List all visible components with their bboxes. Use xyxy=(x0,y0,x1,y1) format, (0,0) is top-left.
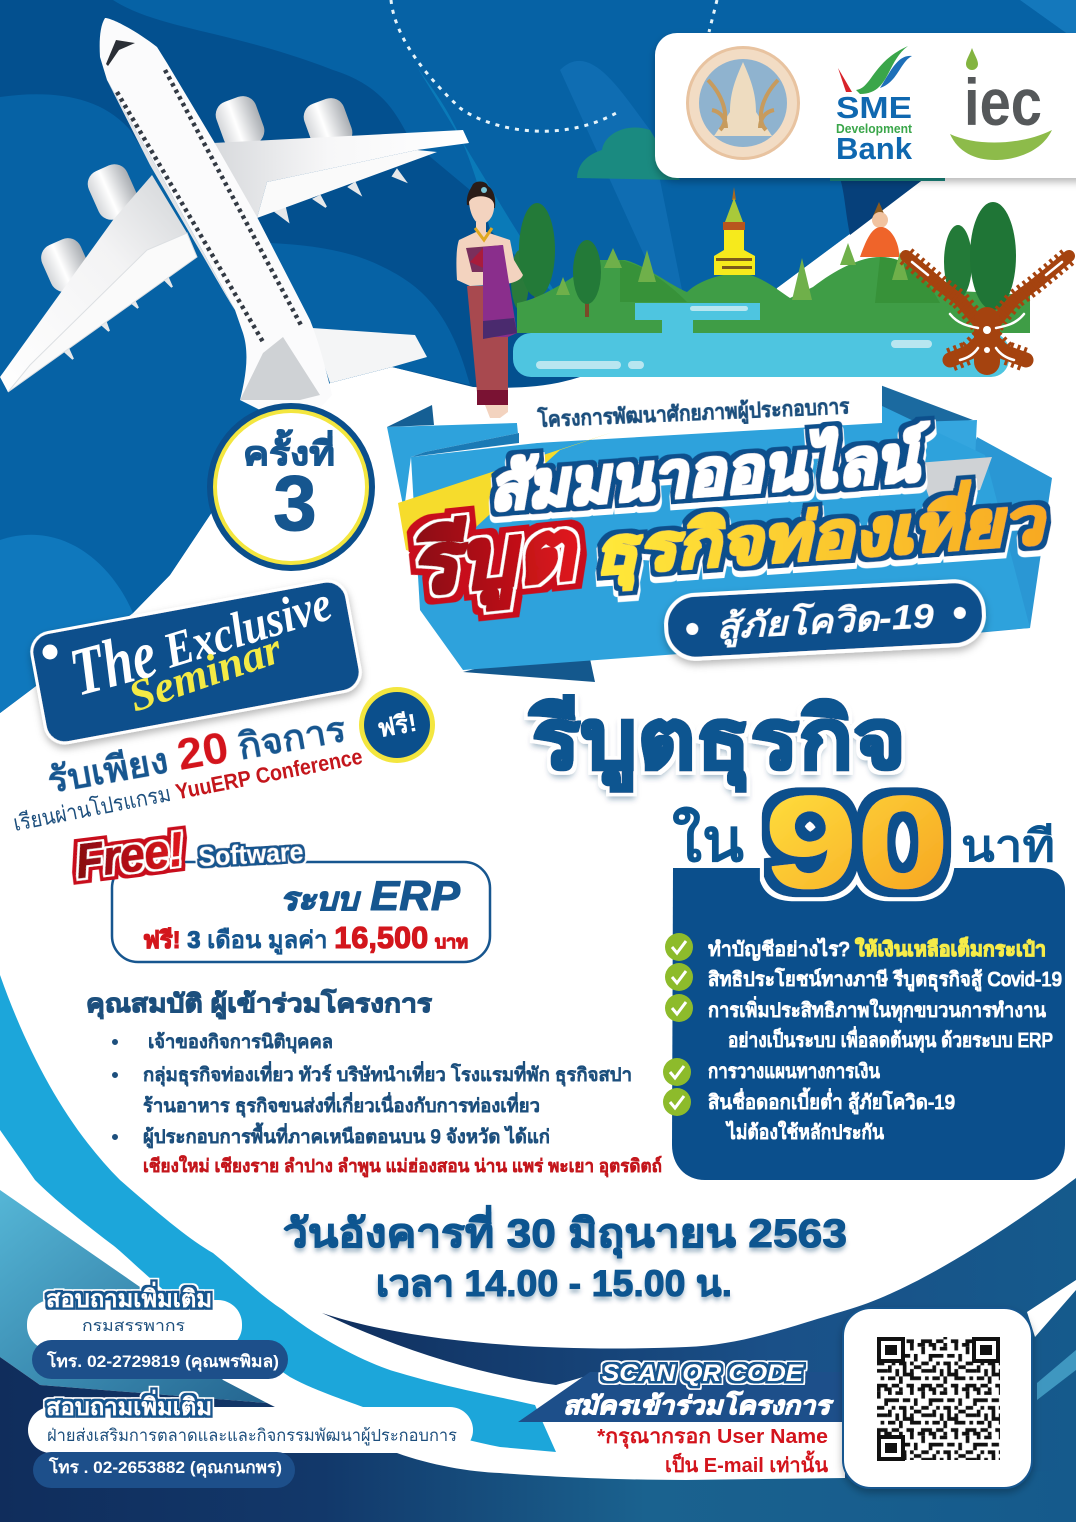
icon: naga ornament xyxy=(906,256,1069,362)
hair pin xyxy=(481,187,487,193)
text: free 3 months value: ฟรี! 3 เดือน มูลค่า 16,500 บาท xyxy=(143,920,468,955)
left wing xyxy=(0,175,197,392)
sticker: software: Software xyxy=(198,837,304,872)
text: ERP system: ระบบ ERP xyxy=(280,872,461,919)
qualifications xyxy=(86,988,662,1177)
pill: fight covid-19 xyxy=(665,580,985,660)
badge: free: ฟรี! xyxy=(375,709,419,743)
agenda list: การเพิ่มประสิทธิภาพในทุกขบวนการทำงาน xyxy=(708,996,1046,1023)
hair xyxy=(467,182,495,208)
contact: revenue department xyxy=(27,1281,288,1379)
heading: in: ใน xyxy=(672,806,744,874)
top wrap xyxy=(466,245,505,272)
cyan stripe xyxy=(0,975,556,1452)
tail fin xyxy=(240,337,320,400)
white streak xyxy=(1027,1280,1076,1337)
logo: iec xyxy=(950,48,1052,160)
qualifications list xyxy=(143,1032,662,1177)
contact heading: สอบถามเพิ่มเติม xyxy=(46,1389,212,1421)
banner ribbon xyxy=(387,382,1052,682)
department name: กรมสรรพากร xyxy=(82,1318,185,1335)
tag: the exclusive seminar: Seminar xyxy=(122,623,288,721)
qr code card xyxy=(843,1308,1032,1488)
qr code xyxy=(877,1337,1000,1461)
right wing xyxy=(213,130,469,218)
badge: free xyxy=(359,687,435,763)
badge: round 3: 3 xyxy=(273,459,317,547)
skirt xyxy=(467,286,508,392)
dark fold xyxy=(411,433,519,457)
qualifications list: ร้านอาหาร ธุรกิจขนส่งที่เกี่ยวเนื่องกับการท่องเที่ยว xyxy=(143,1092,540,1118)
engines xyxy=(37,92,356,296)
time: เวลา 14.00 - 15.00 น. xyxy=(376,1263,732,1304)
right ribbon ends xyxy=(900,437,1052,640)
date: วันอังคารที่ 30 มิถุนายน 2563 xyxy=(283,1205,847,1259)
text: email only: เป็น E-mail เท่านั้น xyxy=(665,1450,828,1477)
back folds xyxy=(387,405,434,427)
trees right xyxy=(944,202,1016,310)
title: tourism business: ธุรกิจท่องเที่ยว xyxy=(590,475,1050,592)
qr call to action xyxy=(518,1360,845,1477)
agenda list: การวางแผนทางการเงิน xyxy=(708,1061,880,1083)
logo: SME Development Bank: SME xyxy=(836,90,912,125)
main panel xyxy=(411,405,1030,670)
shawl xyxy=(483,245,517,337)
body skin xyxy=(456,196,523,286)
contact heading: สอบถามเพิ่มเติม xyxy=(46,1281,212,1313)
scene: green landscape xyxy=(511,187,1069,377)
left ribbon end xyxy=(387,423,519,510)
text: scan qr code: SCAN QR CODE xyxy=(602,1360,804,1387)
logo: SME Development Bank xyxy=(836,46,913,166)
tail stabilizer xyxy=(312,328,427,383)
hem xyxy=(477,390,508,405)
tree canopy xyxy=(573,240,601,304)
small triangle trees xyxy=(556,243,908,300)
agenda list: สินชื่อดอกเบี้ยต่ำ สู้ภัยโควิด-19 xyxy=(708,1088,955,1115)
dark bottom xyxy=(0,1357,1076,1522)
tree front xyxy=(585,295,589,317)
logo: SME Development Bank: Development xyxy=(836,121,913,136)
text: register: สมัครเข้าร่วมโครงการ xyxy=(563,1390,834,1420)
icon: cockpit window xyxy=(106,40,135,66)
qualifications list: กลุ่มธุรกิจท่องเที่ยว ทัวร์ บริษัทนำเที่ยว โรงแรมที่พัก ธุรกิจสปา xyxy=(143,1061,632,1087)
contact: marketing division xyxy=(28,1389,473,1488)
pill: fight covid-19: สู้ภัยโควิด-19 xyxy=(715,595,935,649)
tag: the exclusive seminar: The xyxy=(62,615,164,710)
check icons xyxy=(663,933,693,1116)
fairings xyxy=(63,170,405,359)
bottom swoosh background xyxy=(0,975,1076,1522)
white header strip xyxy=(515,382,882,444)
grey fold xyxy=(917,457,992,500)
agenda list: ทำบัญชีอย่างไร? ให้เงินเหลือเต็มกระเป๋า xyxy=(708,936,1046,961)
heading: reboot business: รีบูตธุรกิจ xyxy=(529,692,906,792)
division name: ฝ่ายส่งเสริมการตลาดและและกิจกรรมพัฒนาผู้ประกอบการ xyxy=(47,1426,457,1446)
text: learn via YuuERP: เรียนผ่านโปรแกรม YuuERP Conference xyxy=(11,744,364,836)
logo: iec: iec xyxy=(964,65,1042,139)
logo: SME Development Bank: Bank xyxy=(836,131,913,166)
phone: โทร. 02-2729819 (คุณพรพิมล) xyxy=(46,1351,279,1372)
pond xyxy=(635,303,760,333)
hills and ground xyxy=(517,257,1030,333)
title: seminar online: สัมมนาออนไลน์ xyxy=(486,420,934,524)
tag: the exclusive seminar: Exclusive xyxy=(156,575,338,679)
qualifications list: เจ้าของกิจการนิติบุคคล xyxy=(148,1032,333,1054)
tag: the exclusive seminar xyxy=(28,575,364,746)
dark wedge xyxy=(322,1178,1076,1522)
woman in traditional dress xyxy=(456,182,523,418)
qualifications list: เชียงใหม่ เชียงราย ลำปาง ลำพูน แม่ฮ่องสอน น่าน แพร่ พะเยา อุตรดิตถ์ xyxy=(143,1155,662,1177)
heading: minutes: นาที xyxy=(961,822,1055,871)
necklace xyxy=(475,228,492,240)
window rows xyxy=(117,70,302,342)
agenda list: ไม่ต้องใช้หลักประกัน xyxy=(725,1121,884,1144)
icon: golden pagoda xyxy=(714,187,755,275)
bullets xyxy=(112,1039,118,1140)
qualifications list: ผู้ประกอบการพื้นที่ภาคเหนือตอนบน 9 จังหวัด ได้แก่ xyxy=(143,1123,550,1148)
badge: round 3 xyxy=(207,403,375,571)
river xyxy=(513,333,1009,377)
teal wedge xyxy=(0,1190,267,1403)
panel: free ERP software xyxy=(112,862,490,962)
badge: round 3: ครั้งที่ xyxy=(243,429,335,472)
shawl band xyxy=(483,318,517,339)
fuselage xyxy=(100,18,332,430)
text: username note: *กรุณากรอก User Name xyxy=(597,1426,828,1449)
agenda list xyxy=(708,936,1062,1144)
airplane xyxy=(0,18,469,430)
trees left xyxy=(511,203,555,310)
phone: โทร . 02-2653882 (คุณกนกพร) xyxy=(48,1457,282,1478)
project heading: โครงการพัฒนาศักยภาพผู้ประกอบการ xyxy=(537,393,850,433)
background: top blue sky shape xyxy=(0,0,1076,713)
background: flight path dashed line xyxy=(391,0,717,131)
yellow fold xyxy=(398,432,613,560)
icon: buddha statue xyxy=(860,202,899,257)
background: teal cloud xyxy=(577,128,945,181)
panel: agenda xyxy=(663,868,1065,1180)
logo card xyxy=(655,33,1076,178)
heading: 90: 90 xyxy=(765,769,949,915)
logo: revenue department seal xyxy=(686,46,800,160)
qualifications heading: คุณสมบัติ ผู้เข้าร่วมโครงการ xyxy=(86,988,433,1020)
sticker: free: Free! xyxy=(73,823,187,889)
feet xyxy=(485,405,508,418)
light blue streak xyxy=(1037,1350,1076,1400)
text: accept only 20 businesses: รับเพียง 20 กิจการ xyxy=(43,702,350,803)
title: reboot: รีบูต xyxy=(404,502,583,619)
